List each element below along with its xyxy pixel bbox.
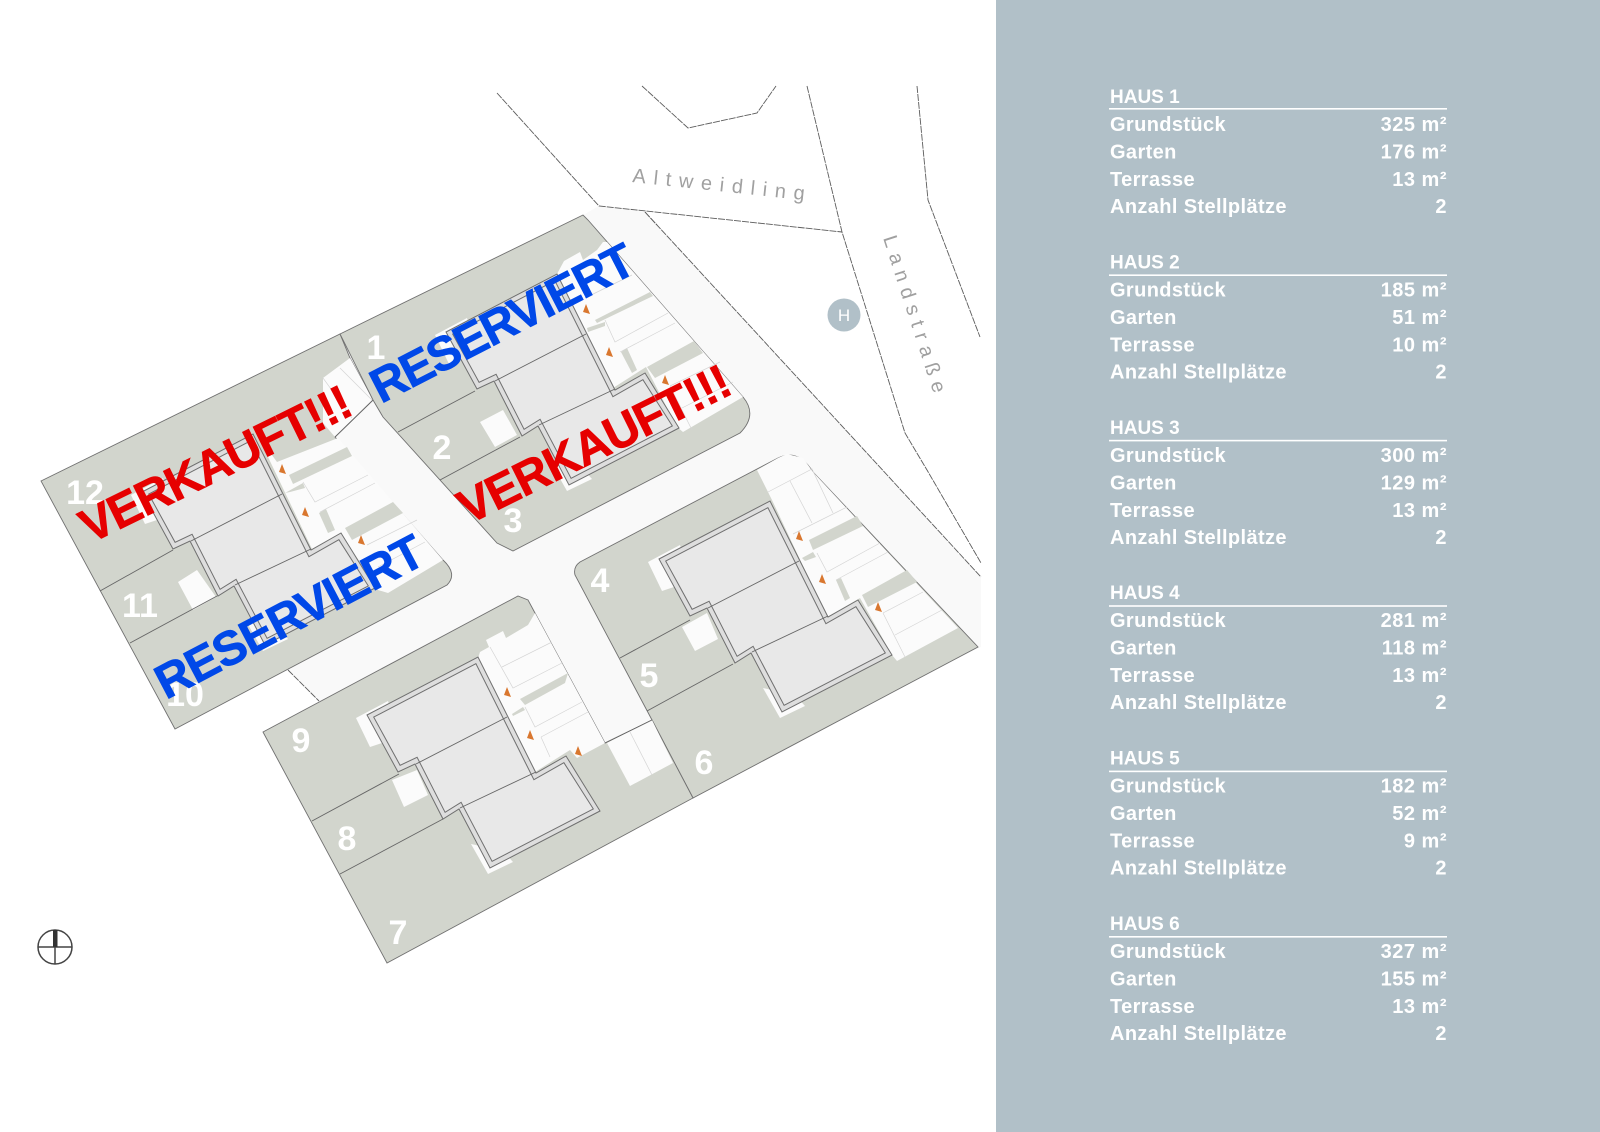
table: Haus 4: 2 (1435, 692, 1447, 714)
icon: north compass (38, 930, 72, 964)
house numbers: 7 (389, 914, 407, 952)
table: Haus 4: Anzahl Stellplätze (1110, 692, 1287, 714)
table: Haus 2: 2 (1435, 361, 1447, 383)
house numbers: 6 (695, 744, 713, 782)
street name: Landstraße: Landstraße (878, 233, 950, 396)
table: Haus 2: Grundstück (1110, 279, 1227, 301)
table: Haus 2: Anzahl Stellplätze (1110, 361, 1287, 383)
table: Haus 3: 129 m² (1381, 472, 1447, 494)
house numbers: 1 (367, 329, 385, 367)
house numbers: 3 (504, 502, 522, 540)
panel: blue background (996, 0, 1600, 1132)
table: Haus 5: 52 m² (1392, 803, 1447, 825)
table: Haus 1: Anzahl Stellplätze (1110, 196, 1287, 218)
bus stop marker (828, 298, 860, 332)
house numbers (66, 329, 713, 952)
table: Haus 2 (1109, 252, 1447, 383)
table: Haus 1: Terrasse (1110, 169, 1195, 191)
plot block: houses 1 to 3 (340, 215, 750, 551)
table: Haus 4: Grundstück (1110, 610, 1227, 632)
table: Haus 5: Garten (1110, 803, 1177, 825)
table: Haus 3: Terrasse (1110, 500, 1195, 522)
table: Haus 5: 182 m² (1381, 776, 1447, 798)
road network (288, 206, 981, 810)
table: Haus 2: Garten (1110, 307, 1177, 329)
table: Haus 5: Anzahl Stellplätze (1110, 858, 1287, 880)
table: Haus 4: 118 m² (1382, 638, 1447, 660)
table: Haus 6: 2 (1435, 1023, 1447, 1045)
table: Haus 1: 325 m² (1381, 114, 1447, 136)
table: Haus 1: 2 (1435, 196, 1447, 218)
house numbers: 12 (66, 474, 104, 512)
table: Haus 4: 281 m² (1381, 610, 1447, 632)
table: Haus 6: 327 m² (1381, 941, 1447, 963)
heading: Haus 3: HAUS 3 (1110, 418, 1180, 439)
table: Haus 2: 185 m² (1381, 279, 1447, 301)
table: Haus 2: 51 m² (1392, 307, 1447, 329)
table: Haus 1: Grundstück (1110, 114, 1227, 136)
table: Haus 1: Garten (1110, 142, 1177, 164)
table: Haus 6: 155 m² (1381, 968, 1447, 990)
table: Haus 4: Garten (1110, 638, 1177, 660)
street boundary lines (288, 86, 981, 701)
table: Haus 6 (1109, 914, 1447, 1045)
table: Haus 5 (1109, 749, 1447, 880)
house numbers: 2 (433, 429, 451, 467)
stamp: RESERVIERT houses 1-3: RESERVIERT (362, 234, 644, 414)
heading: Haus 4: HAUS 4 (1110, 583, 1180, 604)
stamp: VERKAUFT houses 10-12: VERKAUFT!!! (71, 376, 360, 554)
house numbers: 11 (122, 587, 158, 625)
table: Haus 2: 10 m² (1392, 334, 1447, 356)
table: Haus 6: Garten (1110, 968, 1177, 990)
table: Haus 6: Grundstück (1110, 941, 1227, 963)
stamp: RESERVIERT houses 10-12: RESERVIERT (146, 525, 433, 710)
bus stop marker: H (838, 306, 850, 325)
heading: Haus 5: HAUS 5 (1110, 749, 1180, 770)
heading: Haus 2: HAUS 2 (1110, 252, 1180, 273)
table: Haus 1: 13 m² (1392, 169, 1447, 191)
table: Haus 3: 300 m² (1381, 445, 1447, 467)
table: Haus 4: Terrasse (1110, 665, 1195, 687)
street name: Altweidling: Altweidling (631, 165, 806, 205)
table: Haus 6: Terrasse (1110, 996, 1195, 1018)
table: Haus 1 (1109, 87, 1447, 218)
stamp: VERKAUFT houses 1-3: VERKAUFT!!! (449, 355, 740, 535)
table: Haus 6: 13 m² (1392, 996, 1447, 1018)
house numbers: 10 (166, 676, 204, 714)
table: Haus 3: Garten (1110, 472, 1177, 494)
heading: Haus 6: HAUS 6 (1110, 914, 1180, 935)
plot block: houses 7 to 9 (263, 596, 693, 963)
house numbers: 5 (640, 657, 658, 695)
house numbers: 8 (338, 820, 356, 858)
table: Haus 4: 13 m² (1392, 665, 1447, 687)
plot block: houses 10 to 12 (41, 334, 452, 729)
table: Haus 3 (1109, 418, 1447, 549)
table: Haus 3: 13 m² (1392, 500, 1447, 522)
table: Haus 4 (1109, 583, 1447, 714)
table: Haus 6: Anzahl Stellplätze (1110, 1023, 1287, 1045)
table: Haus 5: 9 m² (1404, 831, 1447, 853)
table: Haus 1: 176 m² (1381, 142, 1447, 164)
table: Haus 5: 2 (1435, 858, 1447, 880)
heading: Haus 1: HAUS 1 (1110, 87, 1180, 108)
house numbers: 9 (292, 722, 310, 760)
table: Haus 2: Terrasse (1110, 334, 1195, 356)
table: Haus 3: 2 (1435, 527, 1447, 549)
table: Haus 3: Grundstück (1110, 445, 1227, 467)
house numbers: 4 (591, 562, 610, 600)
table: Haus 5: Terrasse (1110, 831, 1195, 853)
table: Haus 5: Grundstück (1110, 776, 1227, 798)
table: Haus 3: Anzahl Stellplätze (1110, 527, 1287, 549)
plot block: houses 4 to 6 (575, 454, 978, 798)
